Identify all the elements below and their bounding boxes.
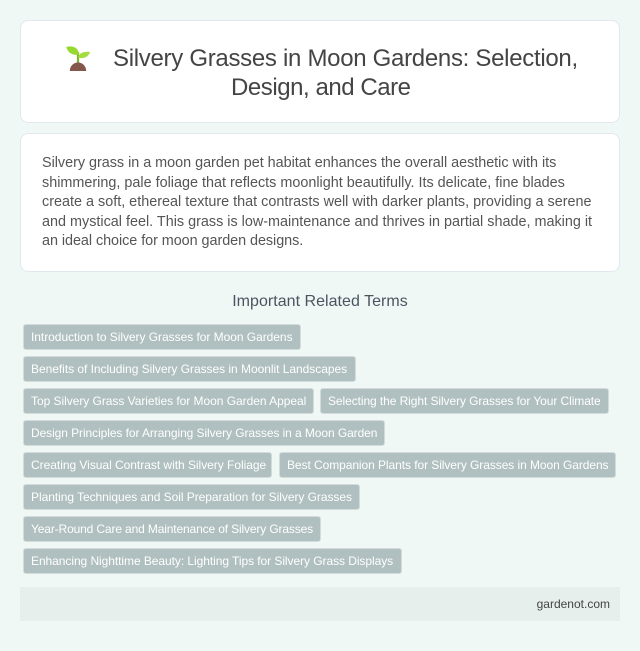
chip: [23, 548, 402, 574]
panel: title card: [20, 20, 620, 123]
chip: [23, 388, 314, 414]
chip: Creating Visual Contrast with Silvery Foliage: [31, 458, 266, 472]
footer: [20, 587, 620, 621]
footer credit: gardenot.com: [537, 597, 610, 611]
chip: Benefits of Including Silvery Grasses in Moonlit Landscapes: [31, 362, 347, 376]
chip: [23, 516, 321, 542]
chip: [279, 452, 616, 478]
chip: Planting Techniques and Soil Preparation for Silvery Grasses: [31, 490, 352, 504]
title: Silvery Grasses in Moon Gardens: Selection,: [113, 45, 578, 72]
chip: [23, 452, 272, 478]
chip: [23, 484, 360, 510]
panel: description: shimmering, pale foliage that reflects moonlight beautifully. Its delicate, fine blades: [42, 175, 565, 191]
chip: Year-Round Care and Maintenance of Silvery Grasses: [31, 522, 313, 536]
icon: seedling: [66, 46, 90, 71]
panel: description: and mystical feel. This grass is low-maintenance and thrives in partial shade, making it: [42, 214, 592, 230]
chip: Enhancing Nighttime Beauty: Lighting Tips for Silvery Grass Displays: [31, 554, 393, 568]
panel: description: [20, 133, 620, 272]
chip: Top Silvery Grass Varieties for Moon Garden Appeal: [31, 394, 306, 408]
title: [113, 45, 578, 101]
chip: Introduction to Silvery Grasses for Moon Gardens: [31, 330, 293, 344]
chip: Best Companion Plants for Silvery Grasses in Moon Gardens: [287, 458, 608, 472]
chip: [23, 420, 385, 446]
chip: Selecting the Right Silvery Grasses for Your Climate: [328, 394, 601, 408]
panel: description: create a soft, ethereal texture that contrasts well with darker plants, providing a serene: [42, 194, 592, 210]
chip: [23, 356, 356, 382]
title: Design, and Care: [231, 74, 411, 101]
chip: [23, 324, 301, 350]
panel: description: Silvery grass in a moon garden pet habitat enhances the overall aesthetic with its: [42, 155, 556, 171]
term chips: [23, 324, 616, 574]
chip: Design Principles for Arranging Silvery Grasses in a Moon Garden: [31, 426, 377, 440]
heading: related terms: Important Related Terms: [232, 293, 408, 310]
panel: description: an ideal choice for moon garden designs.: [42, 233, 303, 249]
chip: [320, 388, 609, 414]
